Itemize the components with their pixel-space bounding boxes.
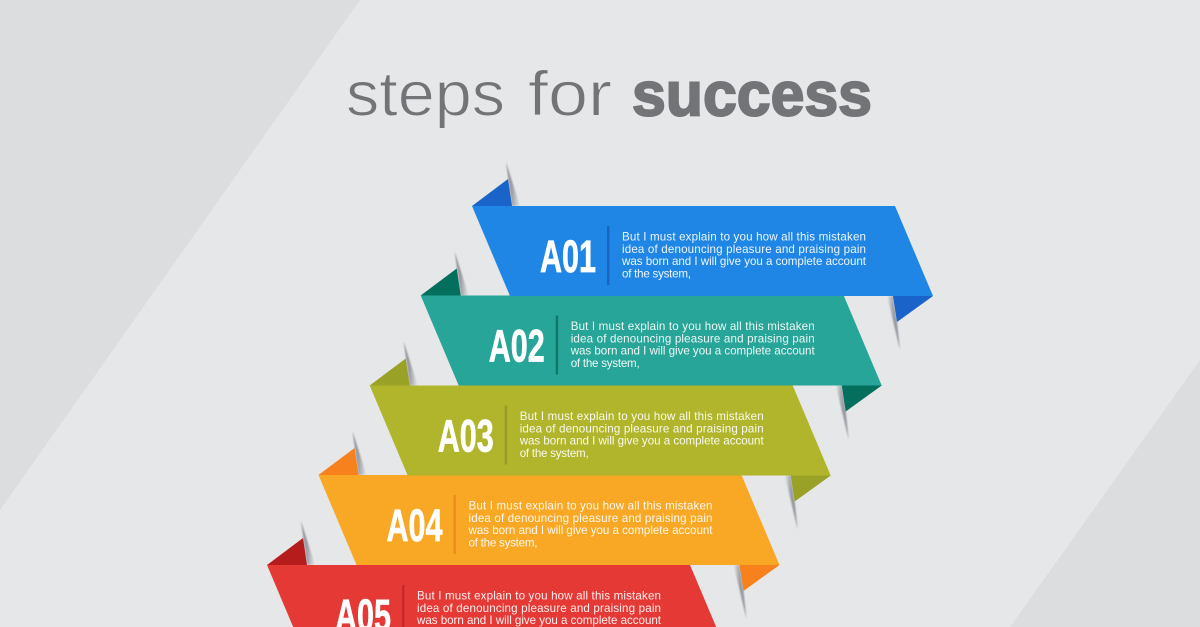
description: of the system, (520, 447, 589, 460)
description (621, 230, 867, 280)
divider (556, 316, 558, 374)
step A03 ribbon (370, 342, 831, 530)
description (570, 320, 815, 370)
label: A03 (438, 410, 494, 462)
divider (402, 585, 404, 627)
description: was born and I will give you a complete account (416, 614, 662, 627)
title (346, 60, 872, 130)
step A02 ribbon (421, 252, 882, 440)
description: was born and I will give you a complete account (468, 524, 713, 537)
description: idea of denouncing pleasure and praising pain (571, 332, 815, 346)
divider (505, 406, 507, 464)
step A04 ribbon (318, 431, 780, 619)
description: idea of denouncing pleasure and praising pain (520, 422, 764, 436)
left fold (267, 521, 315, 565)
step A05 ribbon (267, 521, 716, 627)
background panel: bottom-right diagonal (1010, 360, 1200, 627)
description: But I must explain to you how all this mistaken (622, 230, 866, 244)
left fold (472, 162, 520, 206)
description: But I must explain to you how all this mistaken (520, 410, 764, 423)
description: of the system, (622, 268, 691, 280)
right fold (836, 386, 882, 440)
description (468, 500, 713, 550)
ribbon band (267, 565, 716, 627)
label: A01 (540, 231, 596, 282)
description: was born and I will give you a complete account (621, 255, 867, 268)
ribbon band (472, 206, 933, 296)
ribbon band (421, 296, 882, 386)
step A01 ribbon (472, 162, 933, 350)
description: idea of denouncing pleasure and praising pain (468, 512, 712, 525)
description (519, 410, 764, 460)
description: was born and I will give you a complete account (570, 344, 815, 358)
divider (454, 495, 456, 554)
right fold (785, 476, 831, 530)
left fold (421, 252, 469, 296)
background panel: top-left diagonal (0, 0, 360, 510)
description: of the system, (571, 357, 640, 370)
description: But I must explain to you how all this mistaken (571, 320, 815, 333)
description: idea of denouncing pleasure and praising pain (417, 602, 661, 615)
ribbon band (370, 386, 831, 476)
description: But I must explain to you how all this mistaken (468, 500, 712, 512)
right fold (887, 296, 933, 350)
description (416, 590, 662, 627)
description: was born and I will give you a complete account (519, 434, 764, 448)
left fold (318, 431, 366, 475)
right fold (734, 565, 780, 619)
label: A02 (489, 320, 545, 372)
description: of the system, (468, 536, 538, 550)
divider (607, 226, 609, 285)
title: for (528, 60, 612, 130)
description: idea of denouncing pleasure and praising pain (622, 243, 866, 256)
title: success (632, 60, 872, 130)
ribbon band (318, 475, 780, 565)
label: A04 (386, 500, 442, 551)
title: steps (346, 60, 505, 130)
description: But I must explain to you how all this mistaken (417, 590, 661, 602)
left fold (370, 342, 418, 386)
